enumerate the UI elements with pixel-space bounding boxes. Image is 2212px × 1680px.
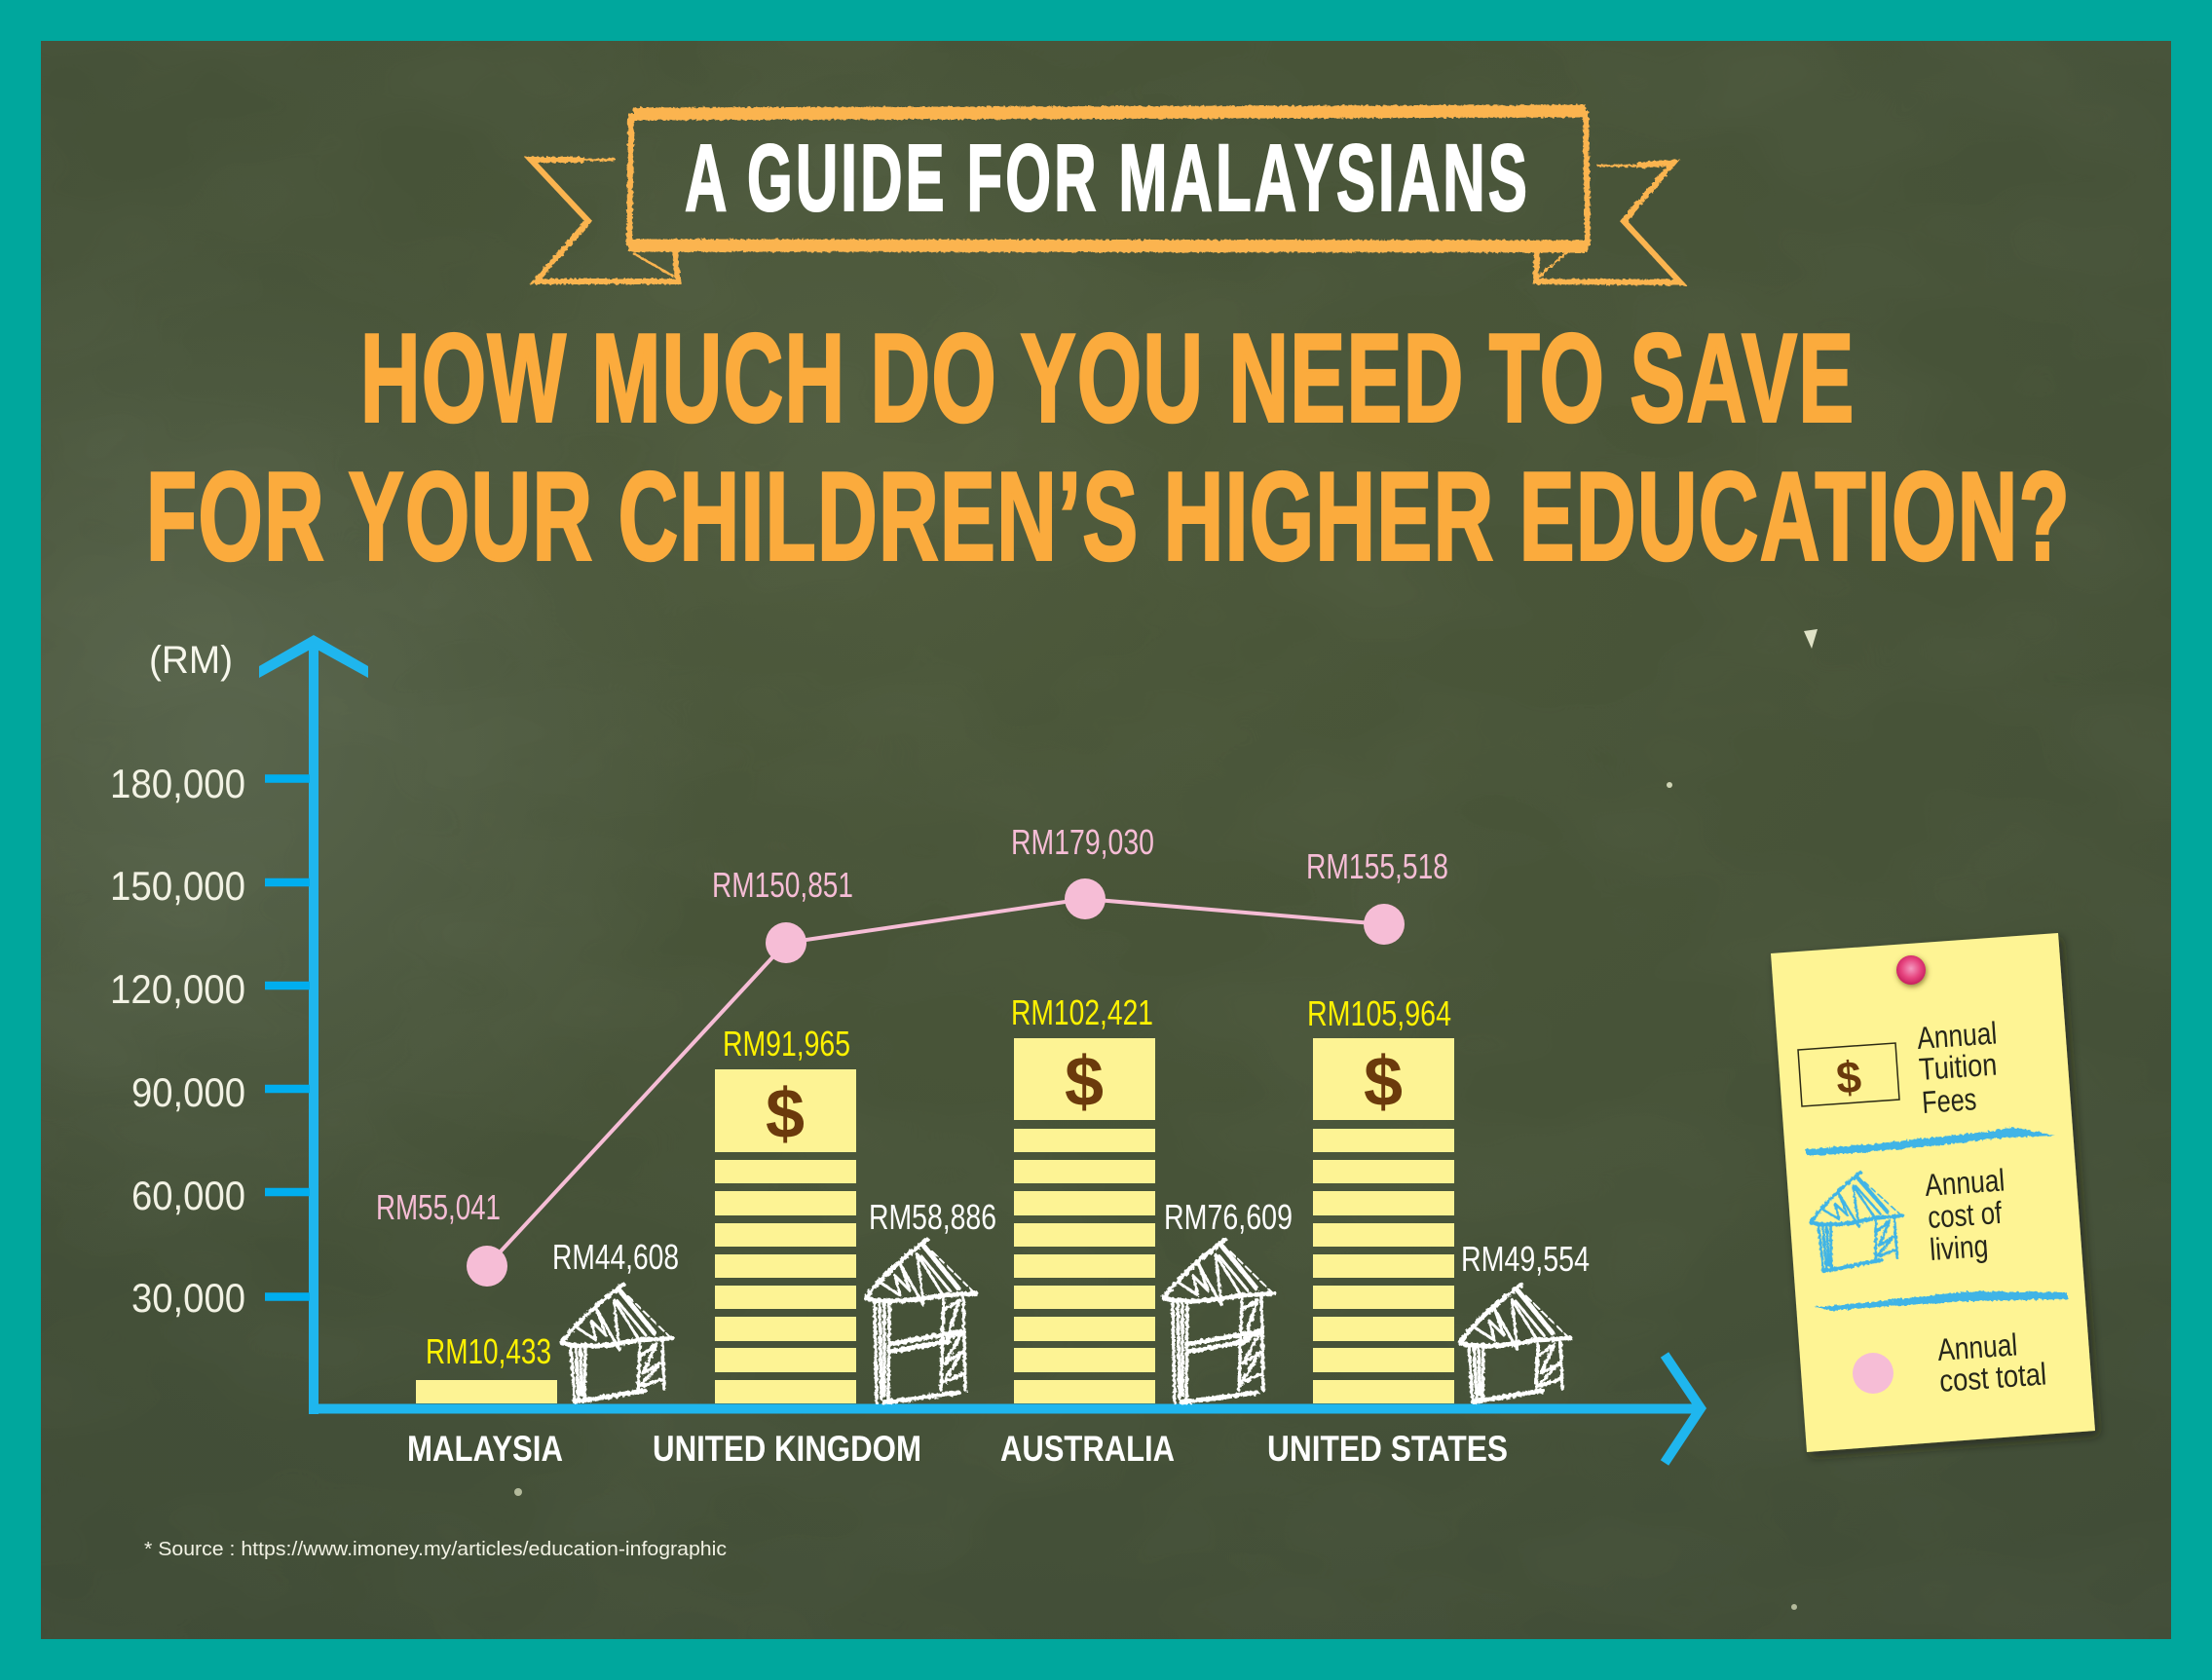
chart axes <box>259 635 1701 1463</box>
legend: tuition fees icon <box>1798 1043 1899 1106</box>
legend: living cost text <box>1924 1162 2006 1267</box>
y axis tick labels: 30,000 <box>131 1275 245 1321</box>
y axis tick labels: 180,000 <box>110 761 245 806</box>
banner title: A GUIDE FOR MALAYSIANS <box>685 126 1527 232</box>
legend: tuition fees text: Fees <box>1921 1081 1977 1120</box>
total cost labels: RM155,518 <box>1306 846 1448 886</box>
heading line 2: FOR YOUR CHILDREN’S HIGHER EDUCATION? <box>146 447 2070 587</box>
cost of living labels: RM44,608 <box>552 1237 679 1277</box>
cost of living labels: RM58,886 <box>869 1197 996 1237</box>
country labels: UNITED KINGDOM <box>653 1429 921 1469</box>
total cost labels: RM179,030 <box>1011 822 1154 862</box>
legend: total cost text <box>1936 1326 2047 1399</box>
tuition bars <box>416 1038 1454 1403</box>
legend: total cost text: cost total <box>1938 1356 2047 1399</box>
y axis tick labels: 120,000 <box>110 966 245 1012</box>
ribbon left tail <box>531 160 678 281</box>
dollar icons on bars: $ <box>1364 1043 1403 1121</box>
pin <box>1896 955 1926 985</box>
y axis unit label: (RM) <box>149 639 233 682</box>
main heading <box>146 309 2070 587</box>
ribbon main rectangle <box>628 111 1588 246</box>
tuition fee labels <box>426 992 1451 1371</box>
y axis tick labels <box>110 761 245 1321</box>
heading line 1: HOW MUCH DO YOU NEED TO SAVE <box>360 309 1854 449</box>
ribbon fold lines <box>584 160 1636 277</box>
dollar icons on bars: $ <box>1065 1043 1104 1121</box>
bar: Malaysia <box>416 1380 557 1403</box>
dollar icons on bars <box>766 1043 1403 1153</box>
y axis ticks <box>265 779 310 1297</box>
line chart: annual cost total <box>467 878 1405 1287</box>
icon: chalk houses for cost of living <box>562 1240 1570 1402</box>
total cost labels <box>376 822 1448 1227</box>
bar: United States <box>1313 1038 1454 1403</box>
legend: tuition fees text: Tuition <box>1918 1046 1998 1087</box>
legend: tuition fees text: Annual <box>1916 1015 1998 1056</box>
legend: living cost icon <box>1810 1172 1904 1272</box>
y axis with arrow <box>259 635 368 1414</box>
y axis tick labels: 90,000 <box>131 1069 245 1115</box>
panel: sticky note legend <box>1771 933 2095 1452</box>
tuition fee labels: RM102,421 <box>1011 992 1153 1032</box>
banner: ribbon frame <box>531 111 1680 282</box>
sticky note paper <box>1771 933 2095 1452</box>
bar: Australia <box>1014 1038 1155 1403</box>
x axis with arrow <box>310 1355 1701 1463</box>
legend: living cost text: living <box>1929 1228 1989 1267</box>
cost of living labels <box>552 1197 1590 1279</box>
tuition fee labels: RM105,964 <box>1307 993 1451 1033</box>
ribbon right tail <box>1536 163 1680 282</box>
legend: tuition fees text <box>1916 1015 1998 1120</box>
legend: tuition fees icon: $ <box>1834 1051 1863 1103</box>
legend: living cost text: cost of <box>1927 1195 2003 1235</box>
divider stroke <box>1805 1127 2055 1156</box>
total cost labels: RM55,041 <box>376 1187 501 1227</box>
tuition fee labels: RM10,433 <box>426 1331 551 1371</box>
country labels: MALAYSIA <box>407 1429 563 1469</box>
bar: United Kingdom <box>715 1069 856 1403</box>
cost of living labels: RM49,554 <box>1461 1239 1590 1279</box>
tuition fee labels: RM91,965 <box>723 1024 850 1064</box>
total cost labels: RM150,851 <box>712 865 853 905</box>
country labels <box>407 1429 1508 1469</box>
legend: living cost text: Annual <box>1924 1162 2006 1203</box>
divider stroke <box>1815 1291 2069 1311</box>
source note: * Source : https://www.imoney.my/articles/education-infographic <box>144 1539 727 1560</box>
dollar icons on bars: $ <box>766 1075 805 1153</box>
legend: total cost text: Annual <box>1936 1326 2018 1367</box>
y axis tick labels: 60,000 <box>131 1173 245 1218</box>
y axis tick labels: 150,000 <box>110 863 245 909</box>
cost of living labels: RM76,609 <box>1164 1197 1293 1237</box>
legend: total cost icon <box>1853 1353 1893 1394</box>
country labels: AUSTRALIA <box>1000 1429 1175 1469</box>
country labels: UNITED STATES <box>1267 1429 1508 1469</box>
